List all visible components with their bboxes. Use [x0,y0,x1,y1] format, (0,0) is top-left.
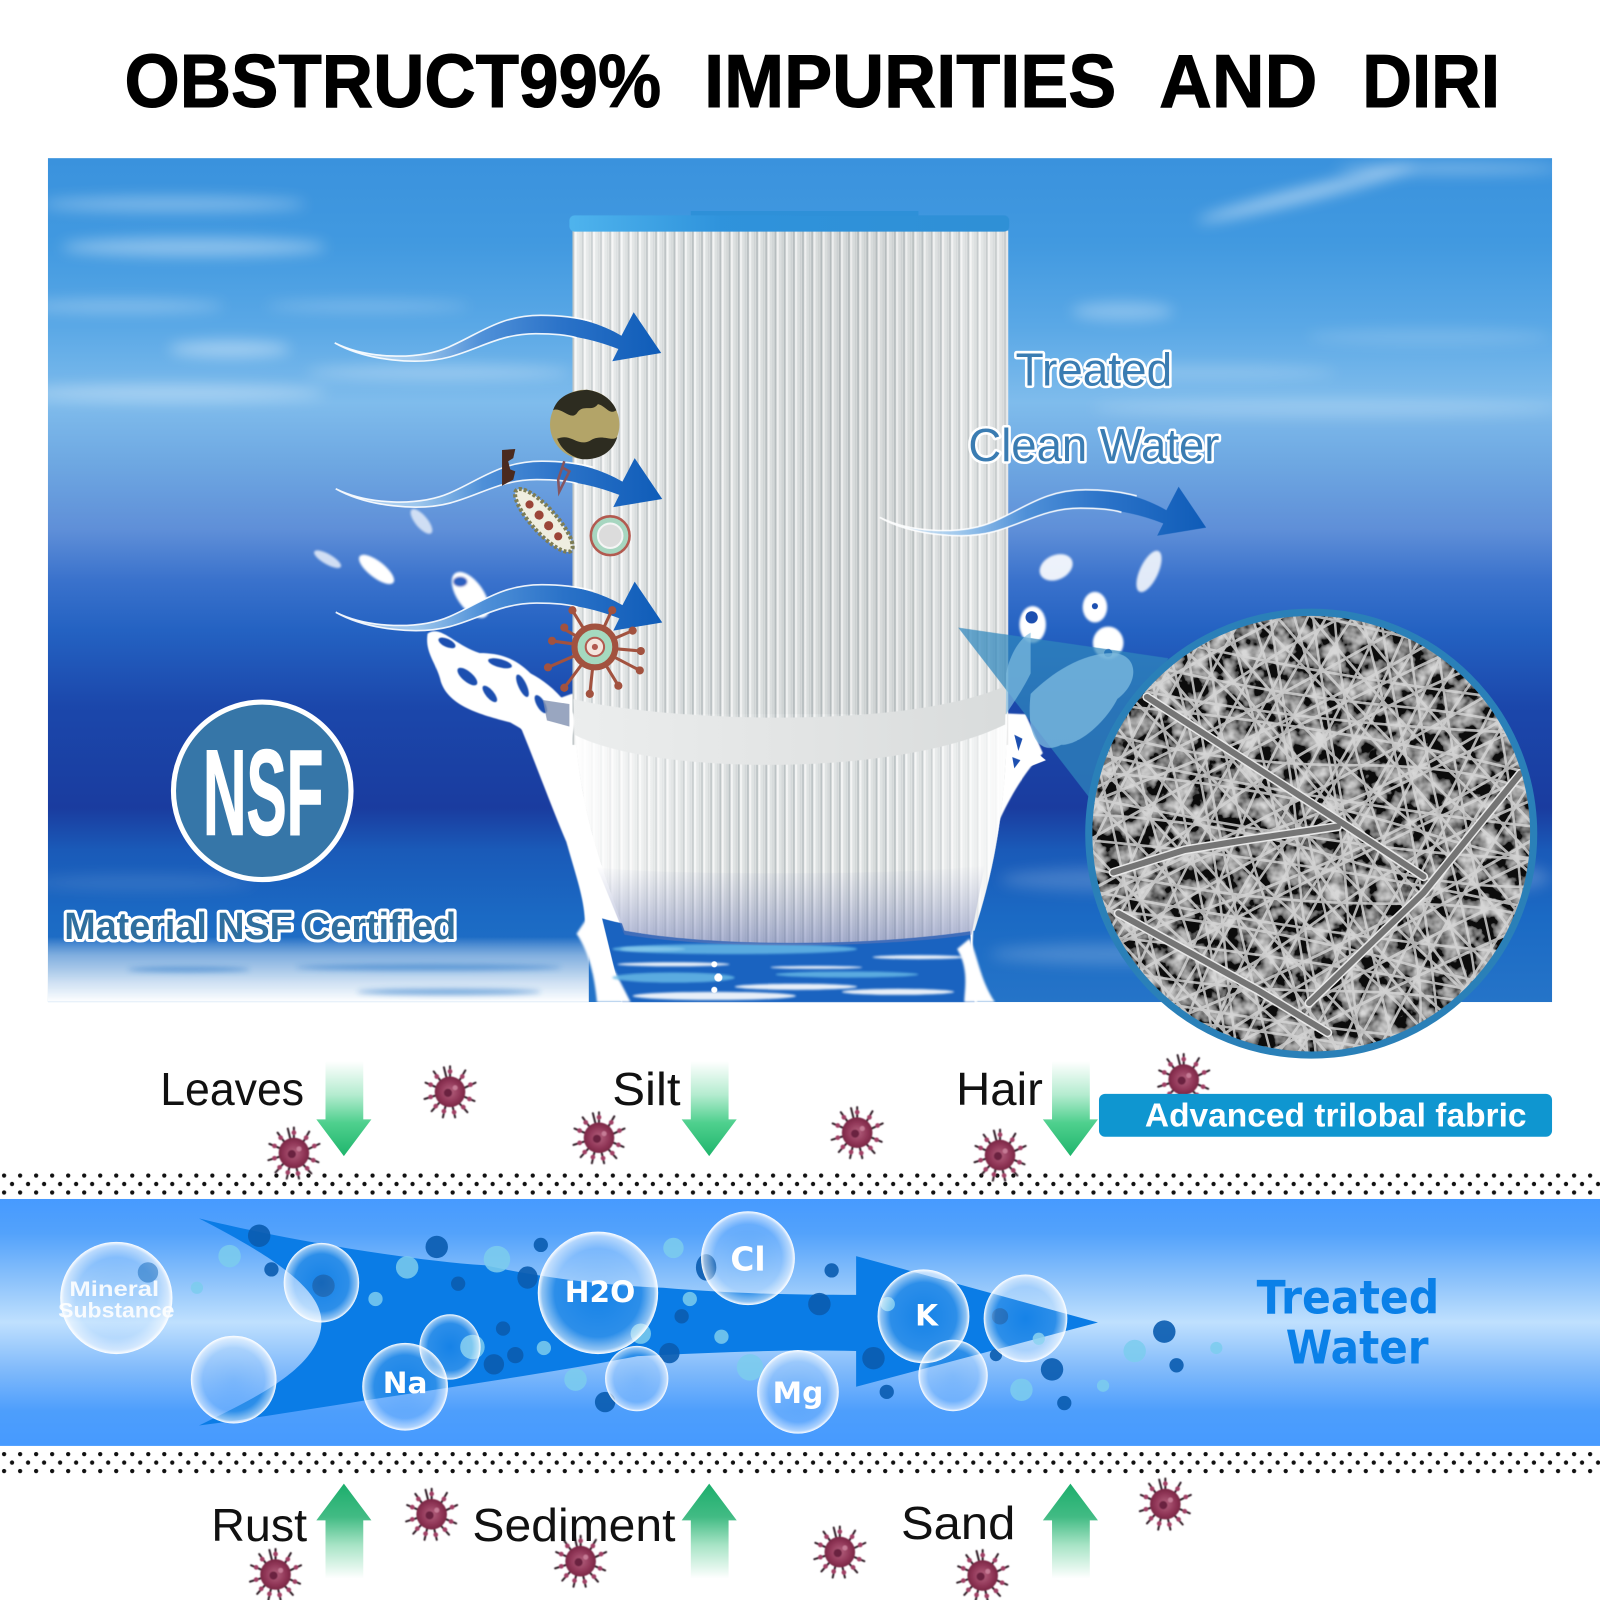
badge: NSF: NSF [203,725,323,861]
arrow: silt [682,1061,737,1156]
label: rust: Rust [211,1499,307,1551]
debris: round microbe [591,516,630,555]
arrow: inflow middle [336,458,662,507]
bubble: K: K [915,1299,939,1333]
arrow: inflow top [335,312,661,361]
bubble [191,1336,277,1423]
dark particles [248,1224,1184,1412]
bubble [419,1314,481,1380]
arrow: sand [1043,1484,1098,1579]
bubble [984,1274,1067,1362]
sky and water background [48,158,1552,1002]
arrow: leaves [316,1061,371,1156]
bubble [284,1243,359,1322]
bubble: Mg [757,1350,839,1434]
bubble: Mg: Mg [773,1376,823,1410]
label: silt: Silt [612,1063,681,1115]
zoom lens wedge [958,628,1168,797]
debris: diatom [507,482,580,559]
bubble: H2O [538,1232,658,1354]
title: AND [1159,40,1317,124]
bubble: K [878,1269,969,1363]
label: advanced trilobal fabric: Advanced trilobal fabric [1145,1098,1527,1135]
left droplets [312,506,496,624]
arrow: rust [316,1484,371,1579]
label: treated clean water: Treated [1016,344,1172,396]
arrow: clean outflow [880,487,1206,536]
label: treated water [1257,1270,1439,1374]
arrow: sediment [682,1484,737,1579]
splash wall behind filter [515,694,1043,1002]
debris: soil ball [550,390,619,459]
top filter membrane dots [0,1173,1600,1197]
label: material NSF certified: Material NSF Certified [64,905,456,947]
virus markers [250,1054,1209,1600]
bubble: mineral substance: Mineral [69,1277,159,1301]
arrow: hair [1043,1061,1098,1156]
water ripples at base [577,918,995,1002]
bubble: Cl [701,1211,795,1305]
label: treated water: Water [1286,1320,1429,1374]
badge: NSF [173,702,351,880]
bubble: Na: Na [383,1366,427,1400]
title: OBSTRUCT99% [124,40,661,124]
bubble [605,1346,668,1411]
bottom filter membrane dots [0,1452,1600,1476]
right droplets and splash [1010,547,1167,773]
wedge splash [1030,653,1133,748]
bubble: H2O: H2O [565,1275,635,1309]
filter band [573,686,1006,765]
title: IMPURITIES [704,40,1116,124]
title: DIRI [1362,40,1500,124]
blue end cap [569,211,1009,232]
debris: rust flake [502,449,515,486]
label: treated water: Treated [1257,1270,1439,1324]
light particles [191,1238,1222,1401]
label: hair: Hair [956,1063,1043,1115]
panel: water scene with filter cartridge [20,158,1600,1175]
bubble: Na [362,1343,448,1431]
debris: chain link [558,461,569,492]
label: leaves: Leaves [160,1063,304,1115]
water channel [0,1199,1600,1446]
bubble: Cl: Cl [730,1240,766,1278]
label: sediment: Sediment [472,1499,676,1551]
filter cartridge [569,211,1009,945]
left splash [427,631,574,776]
flow arrow [199,1218,1098,1426]
bubble: mineral substance: Substance [58,1298,175,1322]
label: treated clean water: Clean Water [968,419,1219,471]
arrow: inflow bottom [336,582,662,631]
debris: red virus [544,606,645,698]
label: sand: Sand [901,1497,1015,1549]
label: treated clean water [968,344,1219,471]
bubble [918,1340,988,1411]
bubble: mineral substance [58,1242,175,1354]
fibre microscope lens [968,489,1600,1175]
